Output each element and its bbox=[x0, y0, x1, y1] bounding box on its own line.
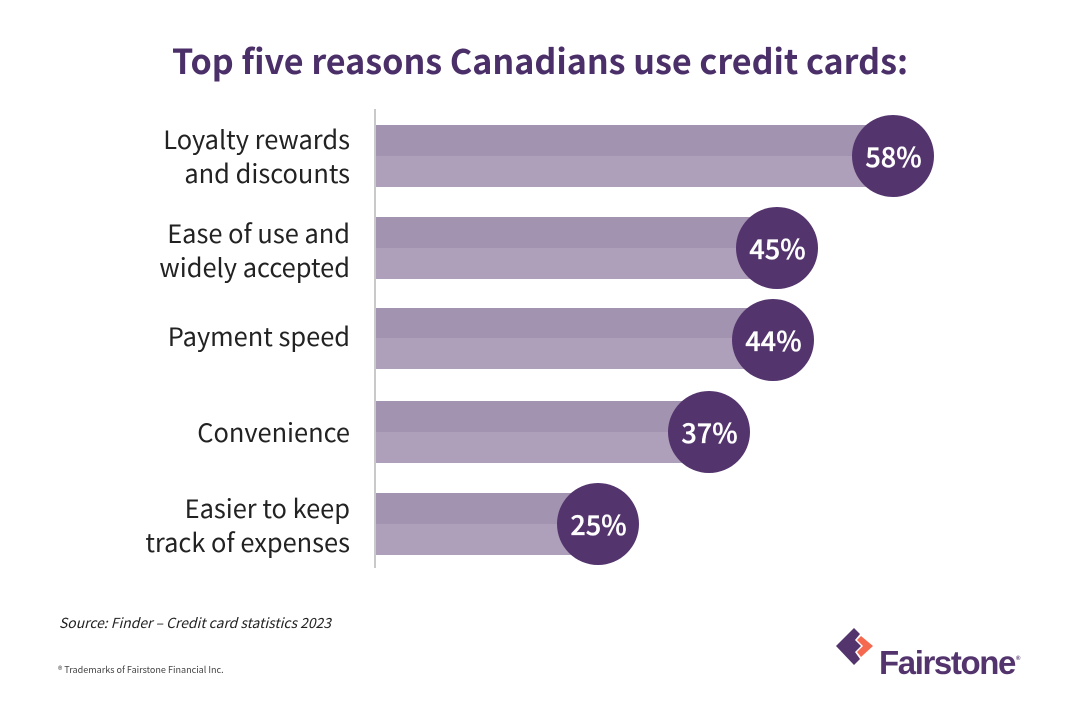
trademark note: ® Trademarks of Fairstone Financial Inc. bbox=[58, 663, 224, 676]
bar: 44% bbox=[376, 308, 748, 369]
row: ease of use bbox=[159, 215, 350, 284]
chart axis bbox=[374, 109, 376, 568]
label: Payment speed bbox=[168, 318, 350, 354]
title: Top five reasons Canadians use credit cards: bbox=[172, 34, 908, 84]
value: 45%: 45% bbox=[749, 228, 806, 267]
value: 45% bbox=[736, 207, 818, 289]
value: 44%: 44% bbox=[745, 320, 802, 359]
label: widely accepted bbox=[159, 248, 350, 284]
bar: 37% bbox=[376, 401, 682, 463]
logo: Fairstone bbox=[836, 628, 1020, 681]
bar: 58% bbox=[376, 125, 866, 187]
label bbox=[163, 121, 350, 190]
label: Easier to keep bbox=[185, 490, 350, 526]
row: loyalty rewards bbox=[163, 121, 350, 190]
row: easier to keep track bbox=[145, 490, 350, 560]
label: track of expenses bbox=[145, 524, 350, 560]
value: 25% bbox=[557, 483, 639, 565]
label: Loyalty rewards bbox=[163, 121, 350, 157]
source note: Source: Finder – Credit card statistics 2023 bbox=[59, 613, 331, 633]
label: and discounts bbox=[184, 154, 350, 190]
label bbox=[145, 490, 350, 560]
value: 44% bbox=[732, 299, 814, 381]
value: 58%: 58% bbox=[865, 136, 922, 175]
value: 25%: 25% bbox=[570, 504, 627, 543]
value: 37%: 37% bbox=[681, 412, 738, 451]
bar: 45% bbox=[376, 217, 750, 279]
value: 58% bbox=[852, 115, 934, 197]
label bbox=[159, 215, 350, 284]
bar: 25% bbox=[376, 493, 571, 555]
wordmark: Fairstone® bbox=[879, 644, 1020, 681]
label: Convenience bbox=[197, 414, 350, 450]
bar chart bbox=[145, 109, 376, 568]
value: 37% bbox=[668, 391, 750, 473]
icon: diamond mark bbox=[836, 628, 873, 665]
label: Ease of use and bbox=[167, 215, 350, 251]
